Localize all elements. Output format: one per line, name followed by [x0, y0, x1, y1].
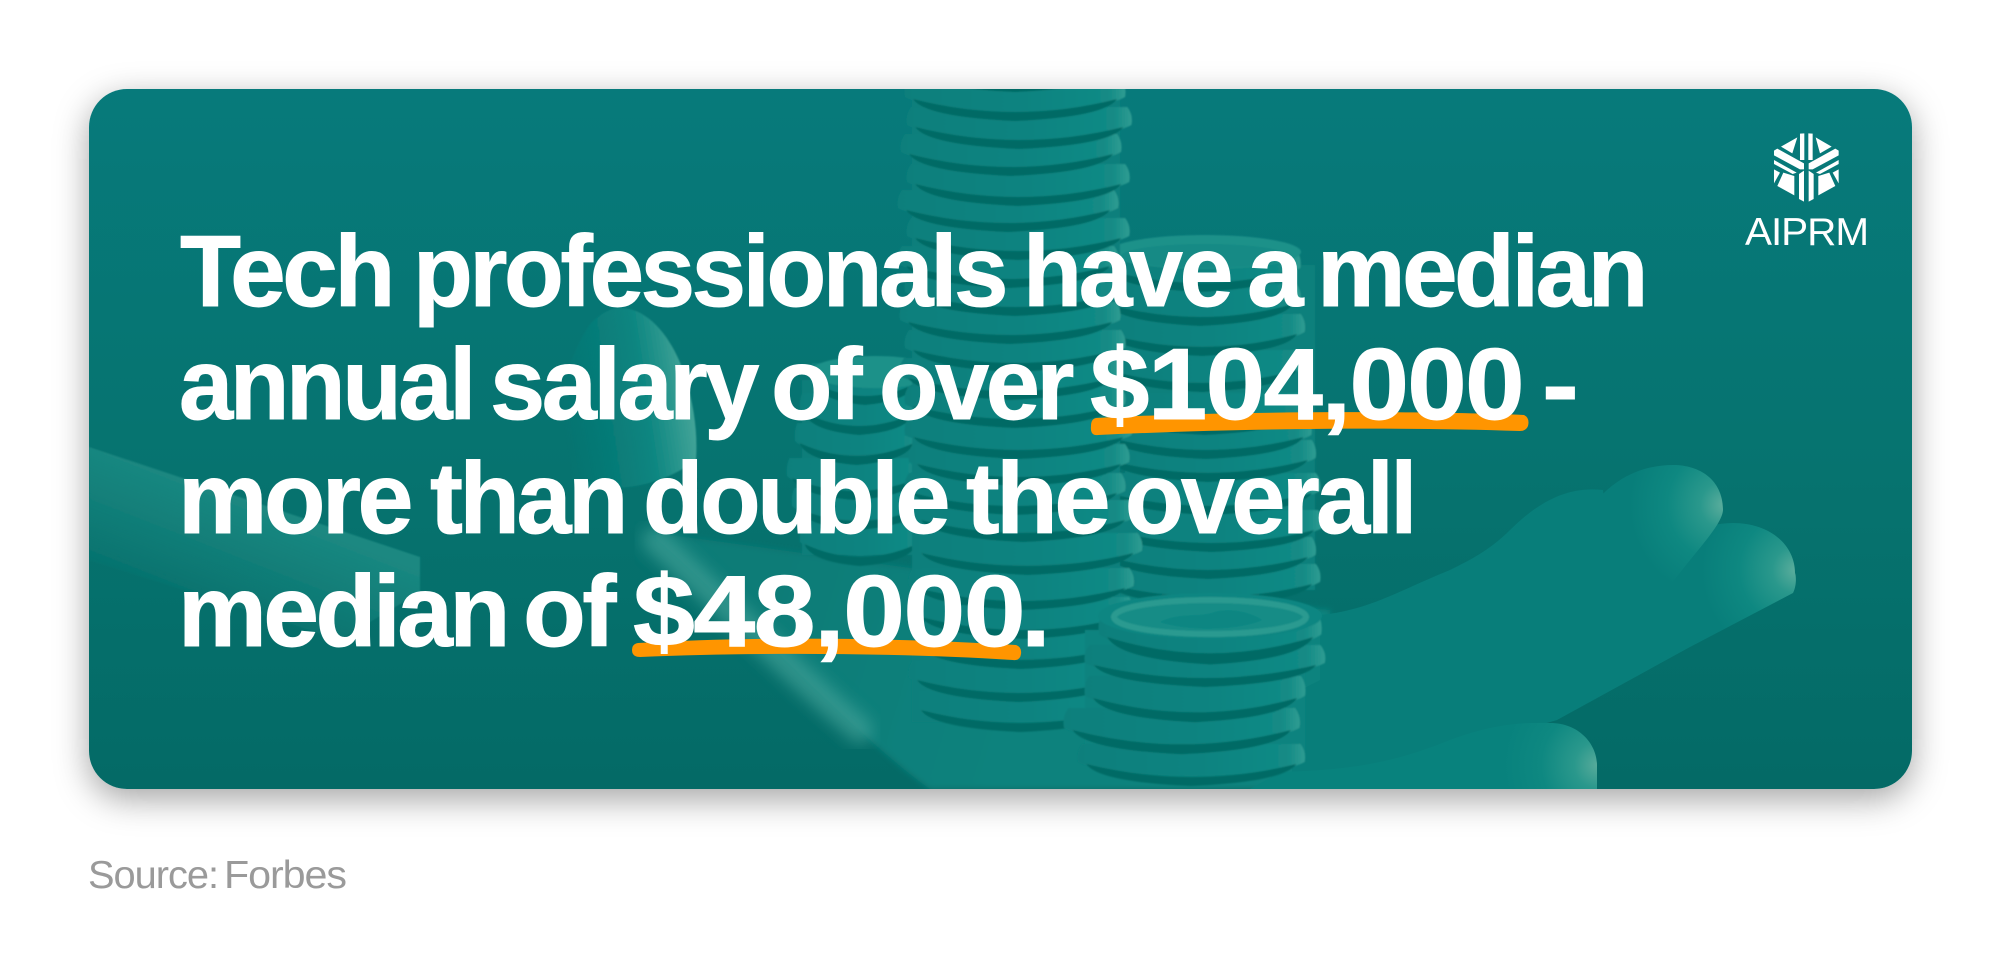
headline: the	[966, 443, 1107, 555]
headline: of	[771, 329, 863, 441]
headline: $48,000	[633, 556, 1024, 668]
headline: median	[178, 556, 507, 668]
headline: of	[523, 556, 617, 668]
main coin stack	[898, 50, 1142, 732]
source note: Source:	[88, 854, 218, 897]
headline: more	[178, 443, 410, 555]
headline: have	[1023, 216, 1230, 328]
palm	[650, 533, 1330, 789]
front coin stack	[1063, 593, 1325, 786]
underline: $104,000	[1091, 412, 1528, 435]
source note: Forbes	[224, 854, 347, 897]
top coin face	[1098, 593, 1322, 639]
headline: professionals	[413, 216, 1005, 328]
finger behind	[1320, 489, 1610, 740]
coin stacks	[787, 50, 1325, 786]
headline: salary	[490, 329, 759, 441]
headline: double	[643, 443, 947, 555]
headline: over	[879, 329, 1073, 441]
panel: teal salary card	[89, 89, 1912, 789]
headline	[178, 216, 1645, 668]
outer finger	[1557, 523, 1796, 720]
headline: median	[1317, 216, 1645, 328]
headline: than	[430, 443, 625, 555]
raised thumb	[553, 308, 696, 488]
underline: $48,000	[632, 639, 1021, 660]
palm highlight	[655, 540, 860, 730]
left coin stack	[787, 356, 940, 566]
headline: a	[1247, 216, 1304, 328]
headline: -	[1542, 329, 1575, 441]
headline: .	[1021, 556, 1047, 668]
right coin stack	[1099, 235, 1323, 606]
logo wordmark: AIPRM	[1745, 211, 1868, 254]
headline: Tech	[180, 216, 392, 328]
lower finger	[1250, 723, 1597, 789]
headline: annual	[179, 329, 473, 441]
logo: AIPRM	[1745, 133, 1868, 254]
headline: $104,000	[1090, 329, 1523, 441]
logo mark	[1774, 133, 1839, 202]
middle finger	[1290, 465, 1723, 789]
left sleeve	[89, 447, 420, 640]
hand photo background	[89, 308, 1796, 789]
headline: overall	[1125, 443, 1414, 555]
